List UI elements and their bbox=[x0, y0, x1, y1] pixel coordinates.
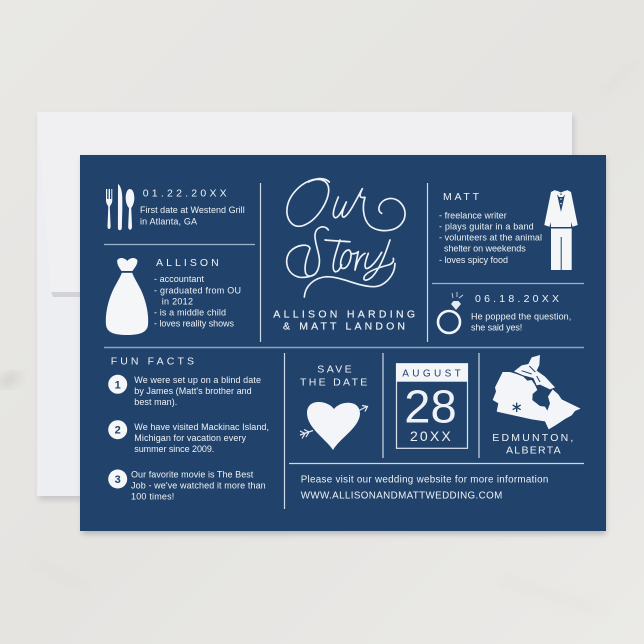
names bbox=[273, 309, 415, 333]
calendar: August 28 20XX: 20XX bbox=[410, 428, 451, 444]
heading: fun facts: FUN FACTS bbox=[111, 356, 194, 368]
fact 2: summer since 2009. bbox=[134, 444, 214, 454]
text: Matt: - plays guitar in a band bbox=[439, 222, 534, 232]
fact 3: 3 bbox=[115, 474, 121, 486]
title: Our Story script bbox=[287, 179, 405, 297]
fact 2: Michigan for vacation every bbox=[134, 433, 246, 443]
card bbox=[80, 155, 606, 534]
text: Matt: shelter on weekends bbox=[444, 244, 526, 254]
names: ALLISON HARDING bbox=[273, 309, 415, 321]
heading: save the date bbox=[300, 364, 367, 389]
text: Matt bbox=[439, 191, 542, 265]
fact 1: We were set up on a blind date bbox=[134, 375, 261, 385]
text: Allison: - graduated from OU bbox=[154, 286, 241, 296]
location: Edmonton, Alberta: EDMUNTON, bbox=[492, 432, 573, 444]
location: Edmonton, Alberta: ALBERTA bbox=[506, 444, 561, 456]
date: first date: 01.22.20XX bbox=[143, 188, 227, 200]
panel: fun facts bbox=[108, 356, 269, 502]
icon: heart with arrow bbox=[300, 402, 368, 450]
fact 2: 2 bbox=[115, 425, 121, 437]
website text bbox=[301, 475, 548, 501]
fact 3: Our favorite movie is The Best bbox=[131, 470, 254, 480]
icon: cutlery bbox=[106, 184, 134, 230]
text: Matt: - loves spicy food bbox=[439, 255, 508, 265]
text: Matt: MATT bbox=[443, 191, 480, 203]
fact 3: Job - we've watched it more than bbox=[131, 481, 266, 491]
calendar: August 28 20XX: AUGUST bbox=[402, 368, 461, 379]
icon: engagement ring bbox=[438, 292, 463, 333]
date: proposal: He popped the question, bbox=[471, 312, 571, 322]
fact 1: by James (Matt's brother and bbox=[134, 386, 252, 396]
fact 1: 1 bbox=[115, 379, 121, 391]
icon: tuxedo bbox=[544, 190, 578, 270]
icon: wedding dress bbox=[106, 258, 148, 335]
names: & MATT LANDON bbox=[283, 321, 405, 333]
fact 2: We have visited Mackinac Island, bbox=[134, 422, 269, 432]
envelope bbox=[37, 112, 574, 500]
fact 3 bbox=[108, 470, 266, 502]
fact 1 bbox=[108, 375, 261, 407]
date: proposal: she said yes! bbox=[471, 323, 522, 333]
date: proposal: 06.18.20XX bbox=[475, 293, 559, 305]
text: Allison bbox=[154, 257, 241, 329]
text: Matt: - freelance writer bbox=[439, 210, 507, 220]
divider lines bbox=[104, 183, 584, 509]
fact 1: best man). bbox=[134, 397, 177, 407]
calendar: August 28 20XX bbox=[396, 363, 468, 448]
icon: map of Canada bbox=[493, 355, 581, 429]
heading: save the date: SAVE bbox=[317, 364, 352, 376]
fact 3: 100 times! bbox=[131, 492, 174, 502]
fact 2 bbox=[108, 420, 269, 454]
text: Allison: ALLISON bbox=[156, 257, 219, 269]
word: Our bbox=[287, 179, 405, 231]
date: first date bbox=[140, 188, 245, 226]
calendar: August 28 20XX: 28 bbox=[404, 381, 457, 433]
date: proposal bbox=[471, 293, 571, 333]
text: Allison: - is a middle child bbox=[154, 308, 226, 318]
text: Allison: - accountant bbox=[154, 274, 204, 284]
location: Edmonton, Alberta bbox=[492, 432, 573, 456]
word: Story bbox=[287, 227, 395, 297]
text: Allison: in 2012 bbox=[162, 297, 193, 307]
website text: Please visit our wedding website for more information bbox=[301, 475, 548, 486]
date: first date: in Atlanta, GA bbox=[140, 216, 197, 226]
text: Matt: - volunteers at the animal bbox=[439, 233, 542, 243]
website text: WWW.ALLISONANDMATTWEDDING.COM bbox=[301, 490, 502, 501]
date: first date: First date at Westend Grill bbox=[140, 205, 245, 215]
text: Allison: - loves reality shows bbox=[154, 319, 234, 329]
heading: save the date: THE DATE bbox=[300, 377, 367, 389]
